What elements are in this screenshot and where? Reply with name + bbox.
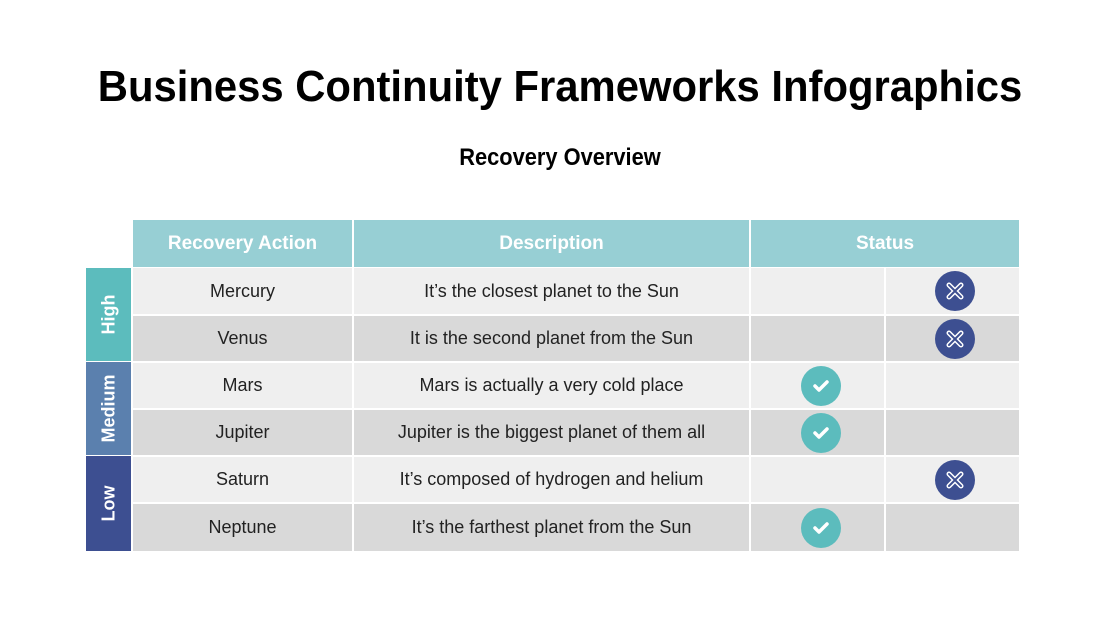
table bbox=[86, 220, 1019, 551]
row: Venus: Venus bbox=[217, 328, 268, 348]
side label: high bbox=[86, 268, 131, 361]
side label: medium: Medium bbox=[98, 374, 118, 443]
subtitle: Recovery Overview bbox=[459, 144, 661, 171]
row: Mars: Mars bbox=[222, 375, 262, 395]
row: Mars: Mars is actually a very cold place bbox=[419, 375, 684, 395]
row: Neptune: Neptune bbox=[208, 517, 277, 537]
side label: low bbox=[86, 456, 131, 551]
row: Jupiter bbox=[133, 410, 1019, 455]
row: Jupiter: Jupiter bbox=[215, 422, 270, 442]
title: Business Continuity Frameworks Infographics bbox=[98, 62, 1022, 111]
side label: medium bbox=[86, 362, 131, 455]
header: recovery action bbox=[133, 220, 352, 267]
header: status: Status bbox=[856, 232, 914, 254]
row: Mars bbox=[133, 363, 1019, 408]
side label: low: Low bbox=[98, 486, 118, 522]
row: Saturn bbox=[133, 457, 1019, 502]
row: Mercury: Mercury bbox=[210, 280, 275, 300]
row: Mercury: It’s the closest planet to the Sun bbox=[424, 280, 679, 300]
header: description bbox=[354, 220, 749, 267]
row: Mercury bbox=[133, 268, 1019, 314]
row: Venus: It is the second planet from the Sun bbox=[410, 328, 693, 348]
header: status bbox=[751, 220, 1019, 267]
row: Saturn: It’s composed of hydrogen and helium bbox=[400, 469, 703, 489]
header: description: Description bbox=[499, 232, 604, 254]
side label: high: High bbox=[98, 294, 118, 334]
row: Neptune: It’s the farthest planet from the Sun bbox=[412, 517, 691, 537]
row: Neptune bbox=[133, 504, 1019, 551]
row: Jupiter: Jupiter is the biggest planet of them all bbox=[398, 422, 705, 442]
row: Saturn: Saturn bbox=[216, 469, 269, 489]
header: recovery action: Recovery Action bbox=[168, 232, 317, 254]
row: Venus bbox=[133, 316, 1019, 361]
